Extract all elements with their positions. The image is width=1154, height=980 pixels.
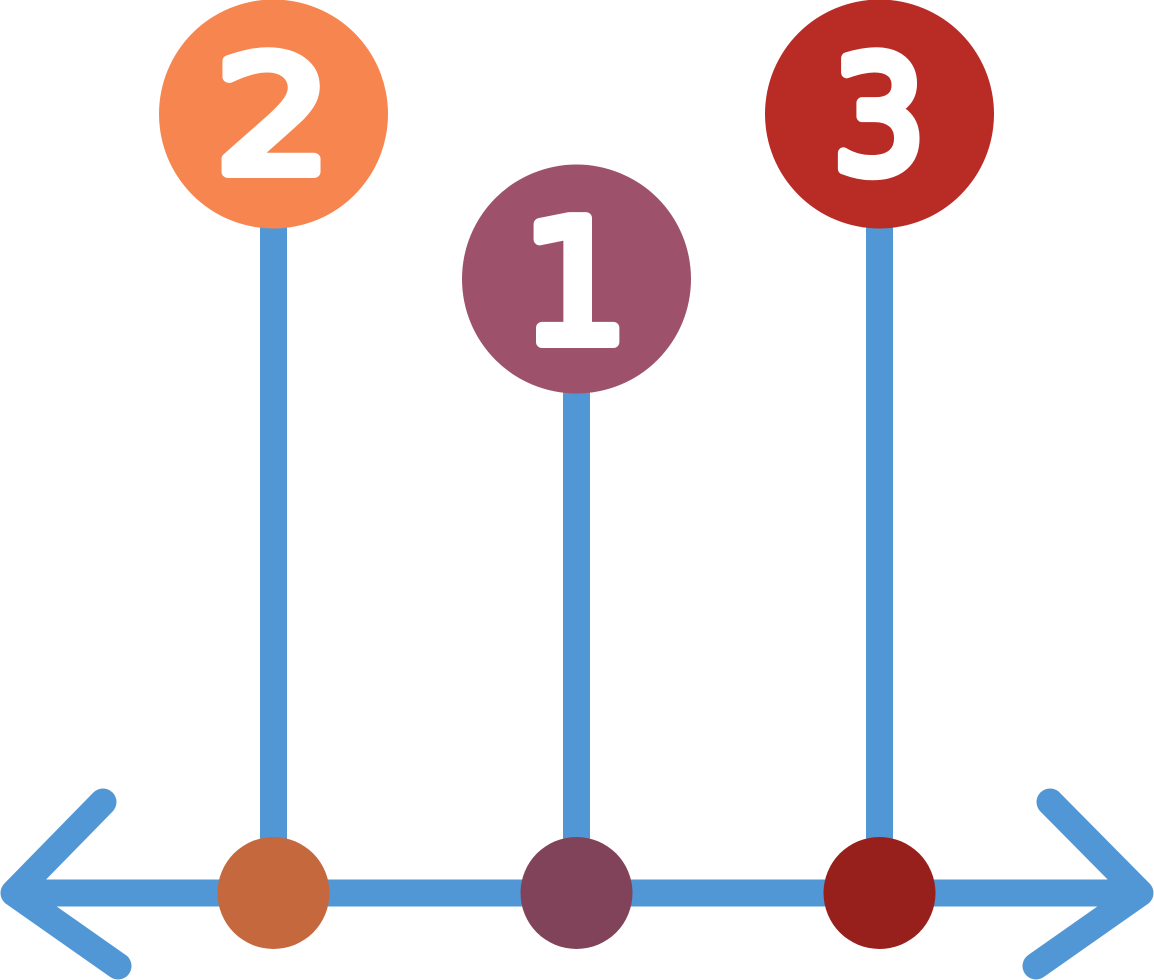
axis node 2 [218,837,330,949]
right arrowhead [1036,802,1140,966]
marker 1 [462,164,691,394]
axis node 1 [520,837,632,949]
marker 3 [765,0,994,228]
marker 1 circle [462,164,691,394]
marker 3 circle [765,0,994,228]
stem 1 [563,385,590,850]
number 2: 2 [215,24,332,210]
number 3: 3 [832,24,926,211]
stem 3 [866,220,893,850]
left arrowhead [14,802,118,966]
double-headed horizontal arrow [14,802,1140,966]
stem 2 [260,220,287,850]
axis line [14,880,1140,906]
axis node 3 [824,837,936,949]
marker 2 circle [159,0,388,228]
number 1: 1 [521,185,629,383]
marker 2 [159,0,388,228]
